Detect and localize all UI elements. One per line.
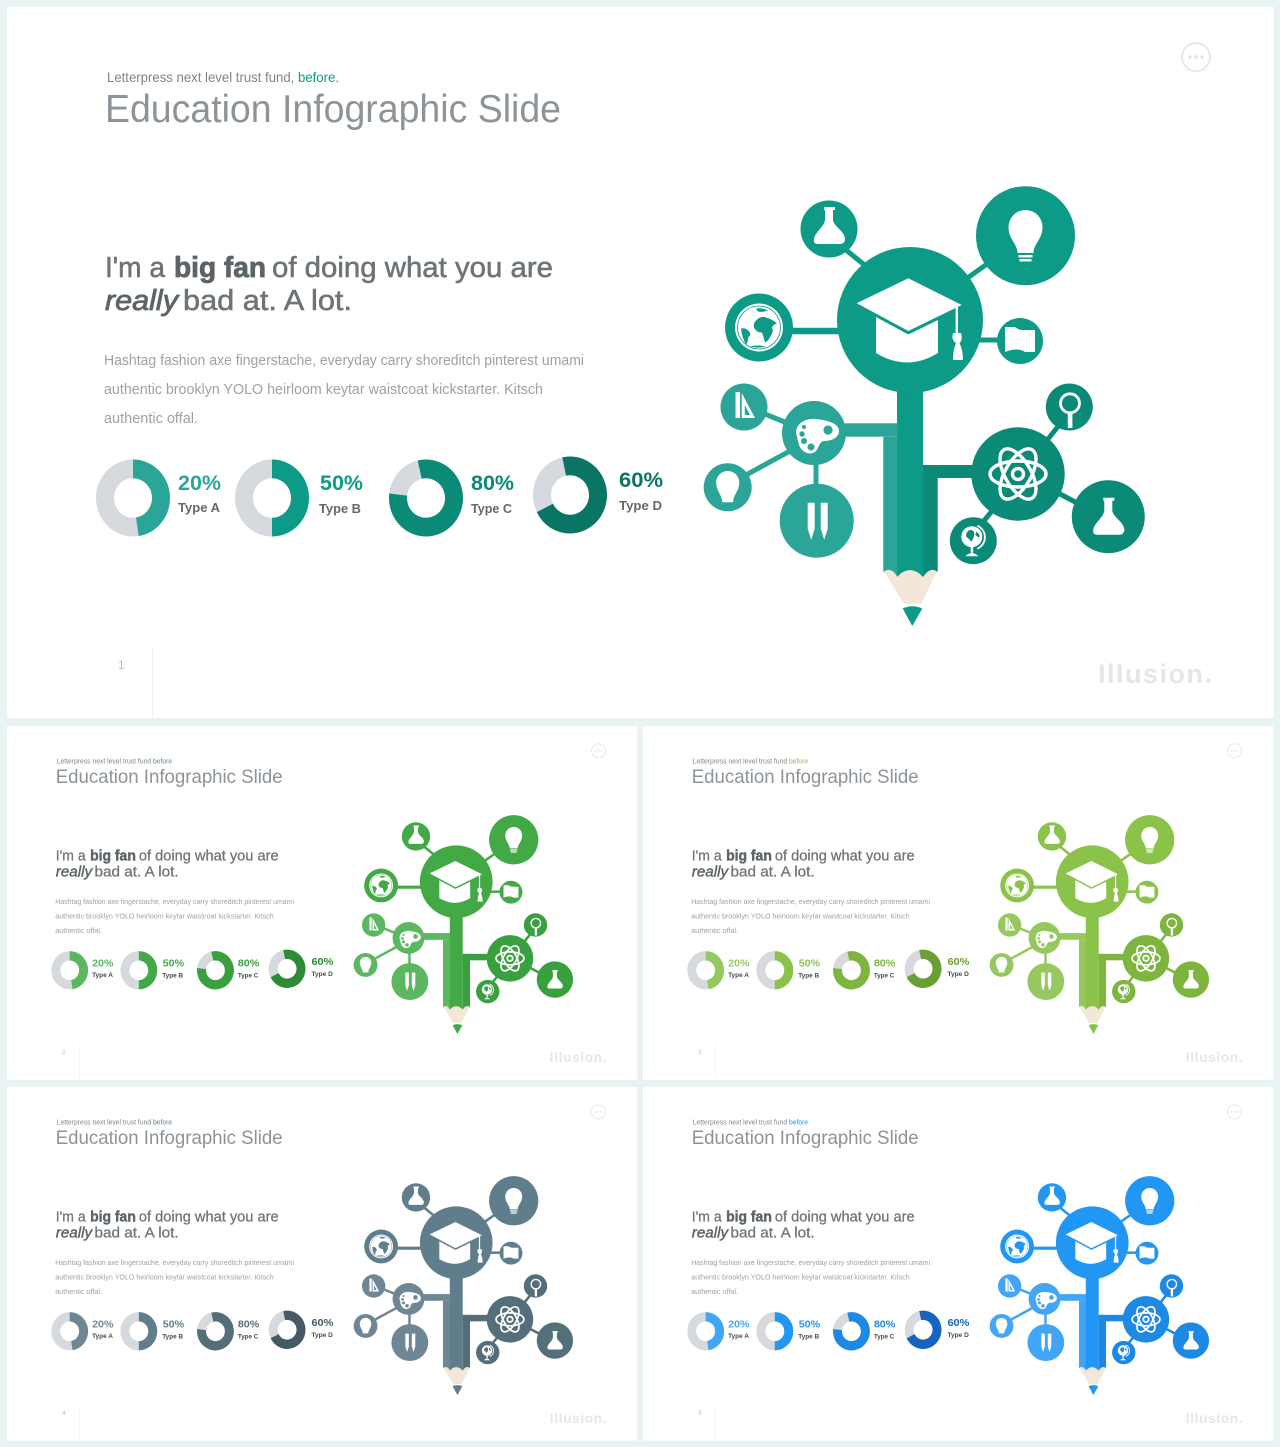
donut labels: 20% <box>728 958 749 969</box>
body paragraph: authentic offal. <box>55 1287 102 1296</box>
heading: really <box>56 865 93 881</box>
donut labels: Type C <box>874 973 895 980</box>
branch to atom <box>923 465 979 478</box>
donut: type C <box>392 463 460 533</box>
donut labels: Type A <box>728 972 749 979</box>
donut labels: Type A <box>178 500 221 515</box>
donut: type B <box>244 469 300 527</box>
donut labels: 80% <box>238 958 259 969</box>
donut labels: 60% <box>619 469 663 492</box>
body paragraph: authentic brooklyn YOLO heirloom keytar waistcoat kickstarter. Kitsch <box>55 912 274 921</box>
connector lines <box>746 250 1079 522</box>
heading: big fan <box>90 848 136 864</box>
brand wordmark: Illusion. <box>1098 659 1212 689</box>
donut labels <box>728 1318 969 1341</box>
body paragraph <box>55 897 294 935</box>
icon: small light bulb <box>704 463 752 511</box>
title: Education Infographic Slide <box>56 766 283 788</box>
page number: 2 <box>62 1050 66 1056</box>
donut labels: Type A <box>728 1333 749 1340</box>
donut labels: 20% <box>728 1319 749 1330</box>
donut labels: Type A <box>92 972 113 979</box>
heading: I'm a <box>56 848 87 864</box>
donut labels <box>178 469 663 516</box>
page number: 3 <box>698 1050 702 1056</box>
icon: light bulb <box>976 186 1075 285</box>
body paragraph <box>691 897 930 935</box>
subtitle: Letterpress next level trust fund before <box>693 758 808 765</box>
heading: really <box>56 1226 93 1242</box>
donut charts <box>56 1313 304 1349</box>
heading: bad at. A lot. <box>95 1226 179 1242</box>
donut labels: Type C <box>471 501 513 516</box>
donut labels: Type C <box>874 1334 895 1341</box>
donut labels: Type D <box>619 498 662 513</box>
body paragraph: authentic brooklyn YOLO heirloom keytar waistcoat kickstarter. Kitsch <box>691 912 910 921</box>
branch to palette <box>840 423 898 437</box>
donut labels: 20% <box>178 472 221 495</box>
body paragraph: authentic brooklyn YOLO heirloom keytar waistcoat kickstarter. Kitsch <box>691 1273 910 1282</box>
donut labels: 50% <box>320 472 363 495</box>
donut labels: 50% <box>799 1319 820 1330</box>
body paragraph: authentic offal. <box>691 1287 738 1296</box>
panel: slide 3 light green <box>643 726 1273 1080</box>
donut labels: Type D <box>947 1332 969 1339</box>
donut labels: Type D <box>947 971 969 978</box>
page number: 1 <box>118 658 125 672</box>
icon: flask <box>800 200 858 258</box>
donut: type A <box>105 469 161 527</box>
donut labels: 80% <box>874 958 895 969</box>
heading: really <box>105 285 180 317</box>
donut charts <box>692 1313 940 1349</box>
donut labels: Type B <box>798 1334 819 1341</box>
body paragraph: authentic brooklyn YOLO heirloom keytar waistcoat kickstarter. Kitsch <box>104 381 543 398</box>
footer divider <box>78 1045 81 1080</box>
main circle: graduation cap <box>837 247 983 393</box>
donut labels: 50% <box>163 958 184 969</box>
heading: of doing what you are <box>139 848 279 864</box>
donut labels: Type B <box>798 973 819 980</box>
panel: slide 4 slate <box>7 1087 637 1441</box>
body paragraph: Hashtag fashion axe fingerstache, everyday carry shoreditch pinterest umami <box>55 1258 294 1267</box>
heading <box>105 252 553 317</box>
body paragraph <box>55 1258 294 1296</box>
heading: really <box>692 865 729 881</box>
icon: desk globe <box>950 517 997 564</box>
panel: slide 2 green <box>7 726 637 1080</box>
brand wordmark: Illusion. <box>550 1411 606 1426</box>
heading: I'm a <box>105 252 166 284</box>
heading: big fan <box>90 1209 136 1225</box>
pencil tree diagram <box>704 186 1145 626</box>
pencil tip <box>883 570 938 626</box>
donut labels: 80% <box>238 1319 259 1330</box>
icon: pens <box>780 484 854 558</box>
icon: flask large <box>1072 480 1145 553</box>
pencil body <box>883 385 938 577</box>
body paragraph: authentic brooklyn YOLO heirloom keytar waistcoat kickstarter. Kitsch <box>55 1273 274 1282</box>
icon: paint palette <box>782 401 846 465</box>
heading: bad at. A lot. <box>731 865 815 881</box>
heading: big fan <box>174 252 266 284</box>
icon: menu dots circle <box>1228 1105 1241 1119</box>
heading: bad at. A lot. <box>731 1226 815 1242</box>
donut labels: Type B <box>319 501 361 516</box>
donut labels: 60% <box>311 957 333 968</box>
pencil tree diagram <box>990 1176 1209 1395</box>
heading: of doing what you are <box>272 252 553 284</box>
pencil tree diagram <box>354 815 573 1034</box>
heading <box>692 848 915 881</box>
icon: earth globe <box>725 294 793 362</box>
donut labels: 80% <box>471 472 514 495</box>
heading: bad at. A lot. <box>183 285 352 317</box>
donut labels: 50% <box>799 958 820 969</box>
brand wordmark: Illusion. <box>1186 1411 1242 1426</box>
donut labels: Type D <box>311 1332 333 1339</box>
icon: menu dots circle <box>592 1105 605 1119</box>
donut labels: 80% <box>874 1319 895 1330</box>
body paragraph: Hashtag fashion axe fingerstache, everyday carry shoreditch pinterest umami <box>691 897 930 906</box>
body paragraph: authentic offal. <box>691 926 738 935</box>
title: Education Infographic Slide <box>105 88 561 131</box>
panel: slide 1 teal <box>7 7 1274 718</box>
title: Education Infographic Slide <box>56 1127 283 1149</box>
panel: slide 5 blue <box>643 1087 1273 1441</box>
donut labels <box>92 957 333 980</box>
footer divider <box>714 1045 717 1080</box>
subtitle: Letterpress next level trust fund, before. <box>107 69 339 85</box>
icon: atom <box>971 427 1065 521</box>
donut labels: 50% <box>163 1319 184 1330</box>
donut labels: 60% <box>311 1318 333 1329</box>
heading: bad at. A lot. <box>95 865 179 881</box>
icon: magnifier <box>1046 384 1093 430</box>
donut charts <box>105 460 603 533</box>
page number: 4 <box>62 1411 66 1417</box>
body paragraph: Hashtag fashion axe fingerstache, everyday carry shoreditch pinterest umami <box>691 1258 930 1267</box>
brand wordmark: Illusion. <box>1186 1050 1242 1065</box>
heading: of doing what you are <box>775 1209 915 1225</box>
donut: type D <box>537 460 603 530</box>
donut labels: 20% <box>92 958 113 969</box>
pencil tree diagram <box>990 815 1209 1034</box>
body paragraph <box>104 352 584 427</box>
donut labels: Type C <box>238 1334 259 1341</box>
heading: of doing what you are <box>139 1209 279 1225</box>
body paragraph: Hashtag fashion axe fingerstache, everyday carry shoreditch pinterest umami <box>104 352 584 369</box>
donut charts <box>692 952 940 988</box>
donut labels: Type A <box>92 1333 113 1340</box>
footer divider <box>714 1406 717 1441</box>
heading: I'm a <box>56 1209 87 1225</box>
page number: 5 <box>698 1411 702 1417</box>
subtitle: Letterpress next level trust fund before <box>57 758 172 765</box>
donut labels: Type B <box>162 973 183 980</box>
body paragraph: authentic offal. <box>104 410 198 427</box>
icon: book <box>997 318 1043 364</box>
donut labels: 60% <box>947 957 969 968</box>
donut labels: Type D <box>311 971 333 978</box>
subtitle: Letterpress next level trust fund before <box>57 1119 172 1126</box>
heading: I'm a <box>692 848 723 864</box>
brand wordmark: Illusion. <box>550 1050 606 1065</box>
donut labels: Type C <box>238 973 259 980</box>
heading <box>56 1209 279 1242</box>
donut labels: Type B <box>162 1334 183 1341</box>
donut labels: 20% <box>92 1319 113 1330</box>
subtitle: Letterpress next level trust fund before <box>693 1119 808 1126</box>
title: Education Infographic Slide <box>692 1127 919 1149</box>
footer divider <box>78 1406 81 1441</box>
heading: I'm a <box>692 1209 723 1225</box>
body paragraph <box>691 1258 930 1296</box>
icon: menu dots circle <box>1228 744 1241 758</box>
heading <box>692 1209 915 1242</box>
donut labels: 60% <box>947 1318 969 1329</box>
icon: menu dots circle <box>1182 43 1210 71</box>
heading: big fan <box>726 1209 772 1225</box>
donut labels <box>728 957 969 980</box>
footer divider <box>152 648 153 718</box>
heading <box>56 848 279 881</box>
body paragraph: Hashtag fashion axe fingerstache, everyday carry shoreditch pinterest umami <box>55 897 294 906</box>
donut labels <box>92 1318 333 1341</box>
donut charts <box>56 952 304 988</box>
icon: menu dots circle <box>592 744 605 758</box>
title: Education Infographic Slide <box>692 766 919 788</box>
icon: ruler and set square <box>720 384 768 430</box>
heading: really <box>692 1226 729 1242</box>
heading: big fan <box>726 848 772 864</box>
body paragraph: authentic offal. <box>55 926 102 935</box>
heading: of doing what you are <box>775 848 915 864</box>
pencil tree diagram <box>354 1176 573 1395</box>
